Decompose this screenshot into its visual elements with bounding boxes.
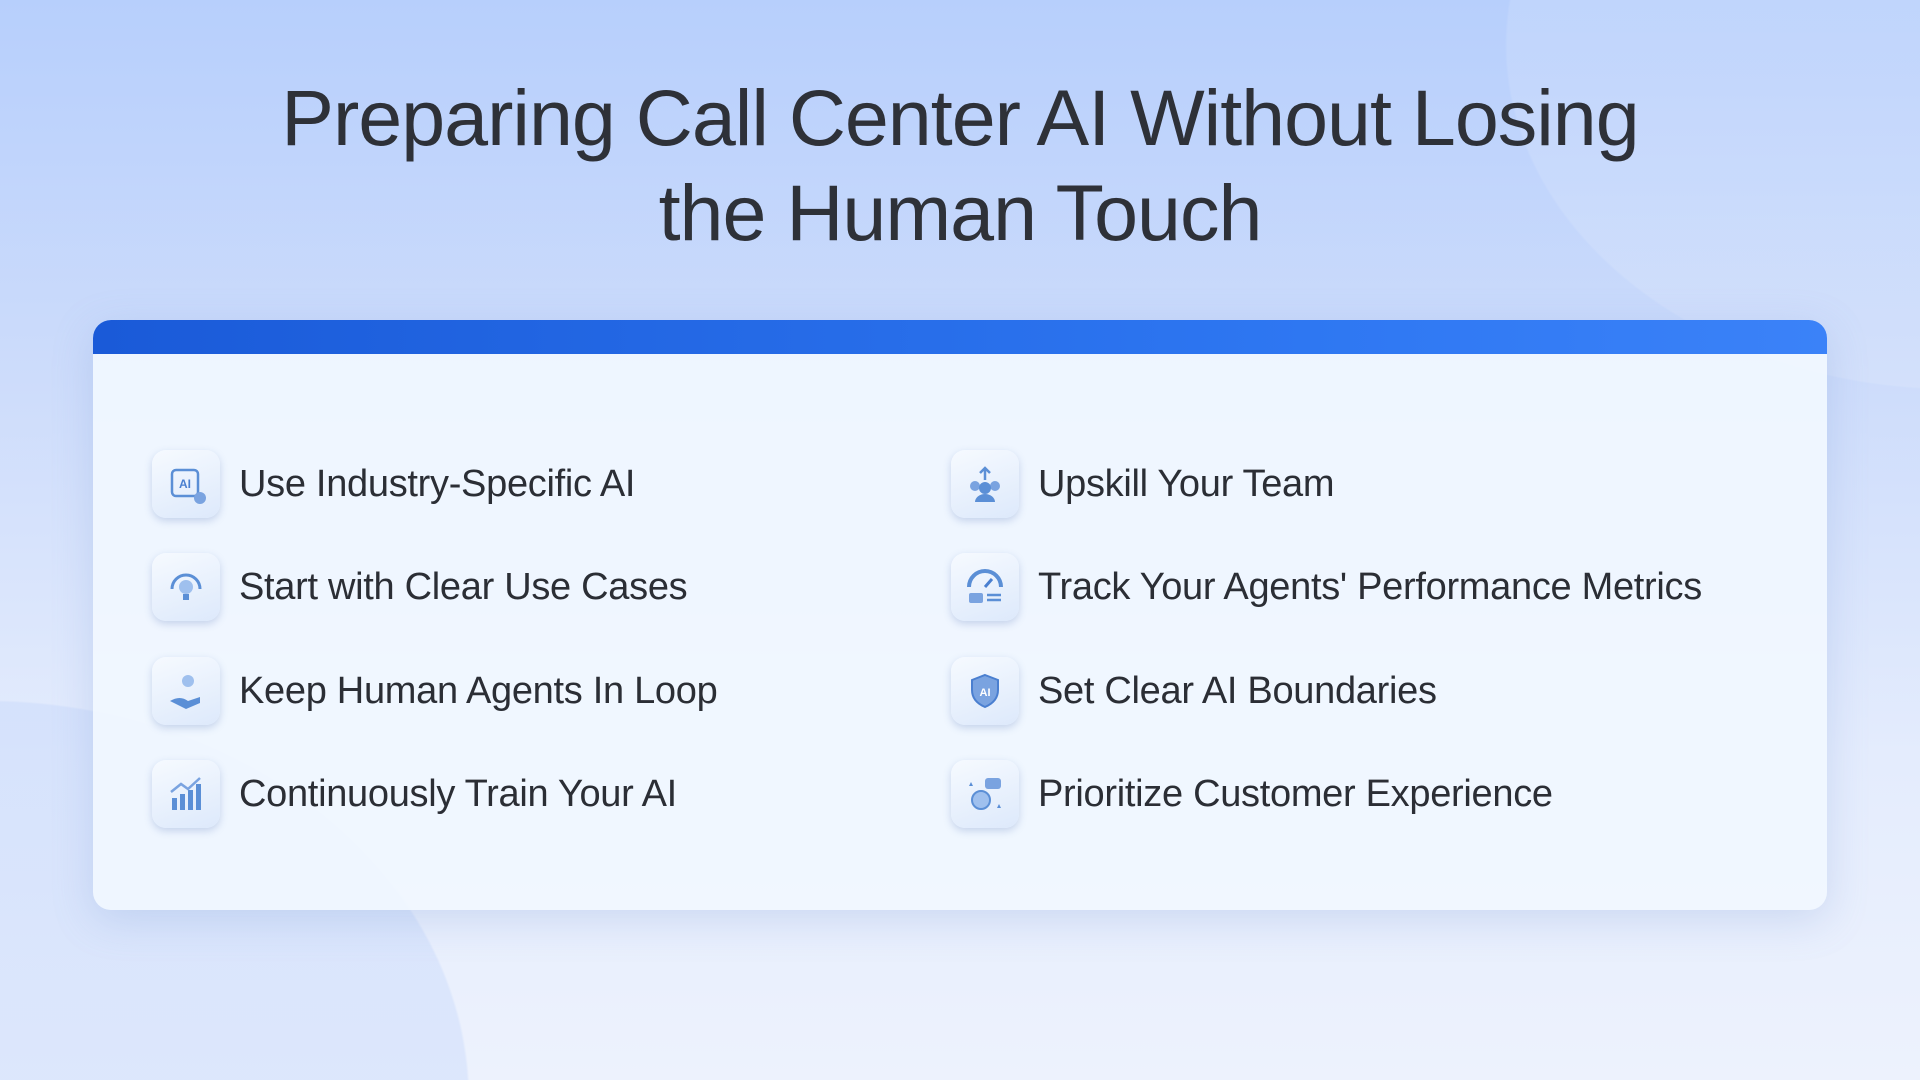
item: Upskill Your Team: Upskill Your Team bbox=[1038, 462, 1334, 504]
panel: checklist card bbox=[93, 320, 1827, 910]
item: Use Industry-Specific AI: Use Industry-Specific AI bbox=[239, 462, 635, 504]
title: the Human Touch bbox=[659, 168, 1261, 257]
header bar bbox=[93, 320, 1827, 354]
item: Use Industry-Specific AI: AI bbox=[179, 477, 191, 491]
item: Set Clear AI Boundaries: Set Clear AI Boundaries bbox=[1038, 670, 1437, 712]
item: Upskill Your Team bbox=[948, 450, 1334, 524]
item: Start with Clear Use Cases: Start with Clear Use Cases bbox=[239, 566, 687, 608]
item: Continuously Train Your AI: Continuously Train Your AI bbox=[239, 772, 677, 814]
item: Set Clear AI Boundaries bbox=[948, 656, 1437, 732]
item: Track Your Agents' Performance Metrics: Track Your Agents' Performance Metrics bbox=[1038, 566, 1702, 608]
item: Set Clear AI Boundaries: AI bbox=[980, 687, 990, 699]
item: Continuously Train Your AI bbox=[148, 760, 677, 834]
item: Track Your Agents' Performance Metrics bbox=[948, 552, 1702, 628]
item: Use Industry-Specific AI bbox=[148, 450, 635, 524]
item: Start with Clear Use Cases bbox=[148, 552, 687, 628]
title bbox=[281, 73, 1639, 257]
item: Prioritize Customer Experience bbox=[948, 760, 1553, 834]
item: Prioritize Customer Experience: Prioritize Customer Experience bbox=[1038, 772, 1553, 814]
item: Keep Human Agents In Loop bbox=[148, 656, 717, 732]
item: Keep Human Agents In Loop: Keep Human Agents In Loop bbox=[239, 670, 717, 712]
title: Preparing Call Center AI Without Losing bbox=[281, 73, 1639, 162]
